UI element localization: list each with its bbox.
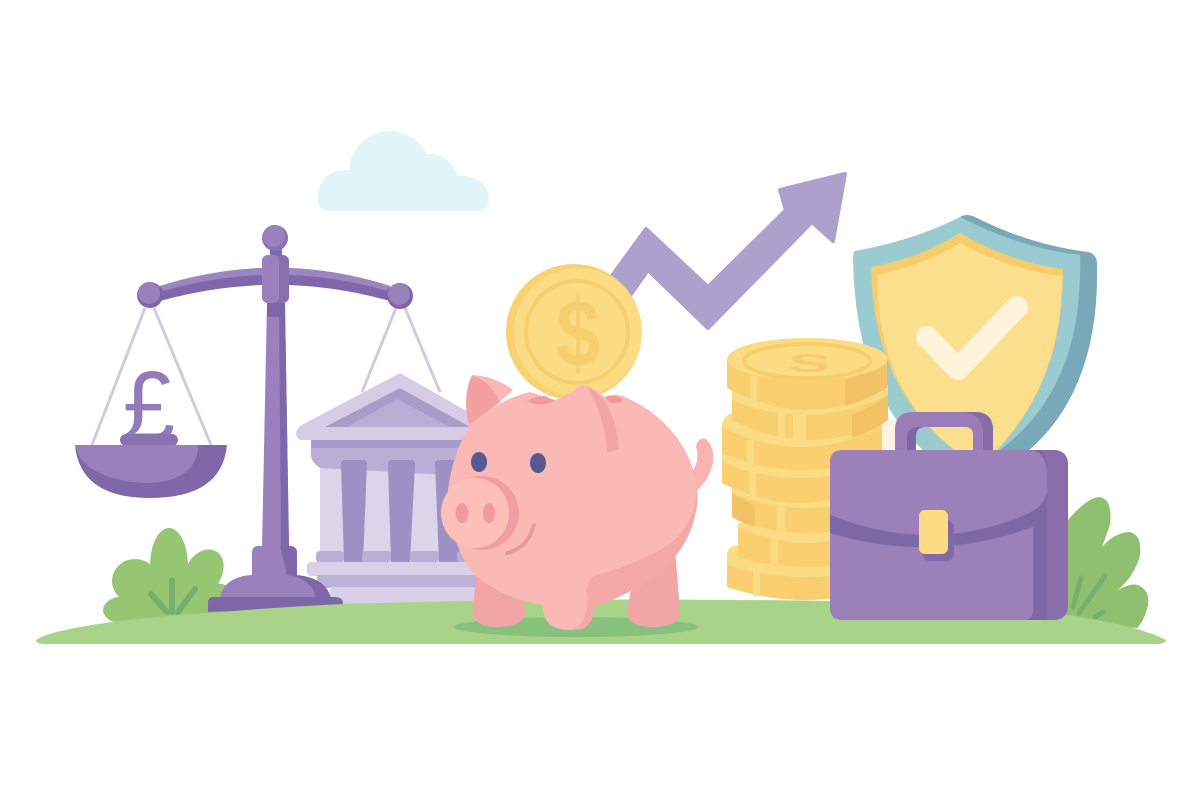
coin 3 xyxy=(722,414,882,470)
bank steps xyxy=(307,562,482,576)
scale strings xyxy=(92,308,440,445)
coin 7 xyxy=(727,546,885,600)
pig eyes xyxy=(471,452,487,472)
pig snout xyxy=(445,476,519,550)
pig body xyxy=(448,385,698,630)
icon: rising arrow xyxy=(606,174,845,328)
icon: ground xyxy=(36,600,1166,644)
scale pound sign: £ xyxy=(123,351,175,463)
pig shadow xyxy=(454,617,698,637)
briefcase handle xyxy=(895,412,993,452)
briefcase clasp xyxy=(922,520,954,561)
scale end balls xyxy=(137,282,163,308)
icon: right bush xyxy=(1060,497,1148,628)
pig right ear xyxy=(587,386,619,453)
coin 4 xyxy=(722,450,880,503)
bank columns xyxy=(320,460,480,555)
icon: piggy bank xyxy=(441,375,713,637)
icon: left bush xyxy=(103,528,238,625)
icon: coin stack: S xyxy=(788,350,830,378)
scale base xyxy=(220,546,331,598)
bank roof xyxy=(296,373,500,440)
icon: briefcase xyxy=(830,412,1068,620)
icon: balance scale xyxy=(75,225,440,612)
coin 1 xyxy=(727,359,887,410)
briefcase body xyxy=(830,450,1068,620)
scale beam xyxy=(160,268,262,301)
coin 5 xyxy=(732,485,880,533)
coin 2 xyxy=(732,385,888,440)
icon: coin in slot: $ xyxy=(556,281,600,387)
pig legs xyxy=(473,570,525,627)
icon: coin stack xyxy=(722,338,888,600)
scale pole xyxy=(262,303,289,548)
icon: coin in slot xyxy=(506,264,642,400)
pig smile xyxy=(507,525,534,553)
pig tail xyxy=(693,439,713,492)
pig slots xyxy=(527,396,555,404)
briefcase flap xyxy=(830,450,1047,535)
icon: cloud xyxy=(318,131,489,211)
scale left pan xyxy=(75,445,227,498)
pig left ear xyxy=(466,375,513,430)
coin 6 xyxy=(738,523,875,567)
icon: bank building xyxy=(296,373,500,605)
shield check mark xyxy=(927,307,1017,369)
cream block behind stack xyxy=(882,420,896,452)
icon: shield xyxy=(853,215,1097,452)
